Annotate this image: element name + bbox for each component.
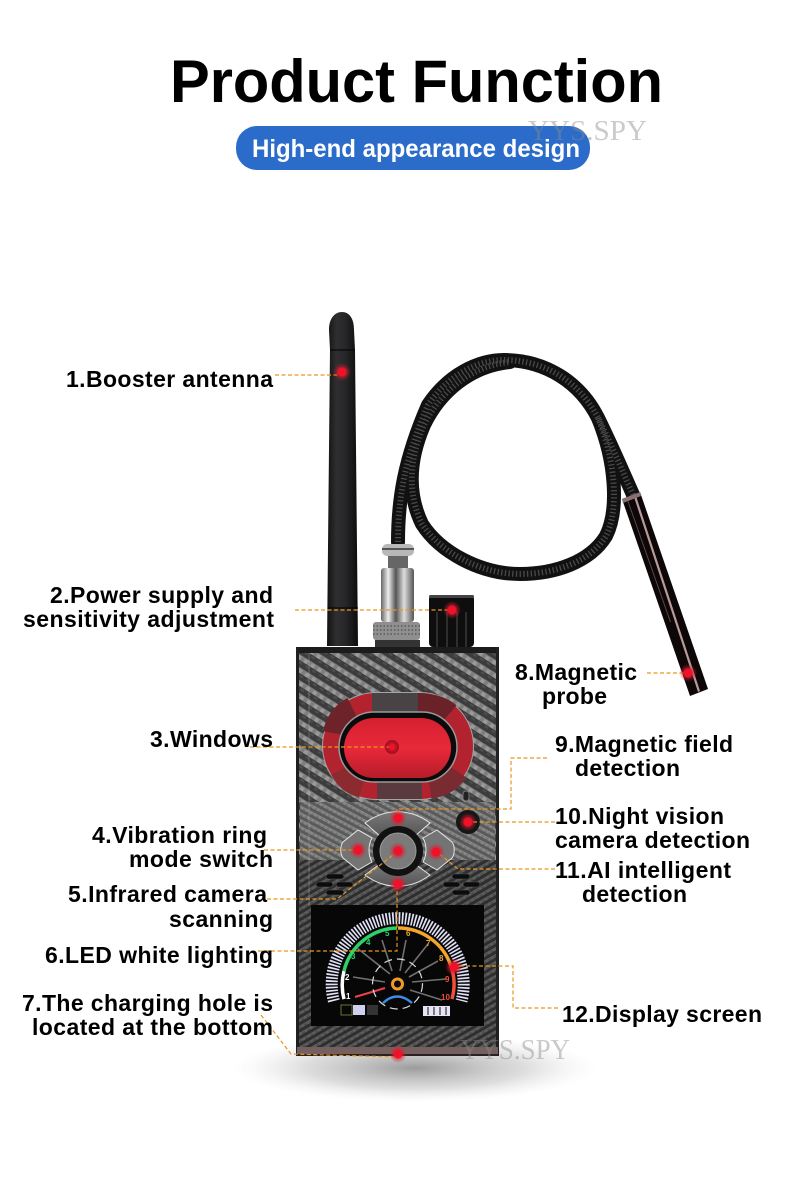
label 9: magnetic field: 9.Magnetic field (555, 731, 733, 757)
gauge numbers: 9 (445, 975, 450, 984)
gauge numbers: 3 (351, 952, 356, 961)
gauge numbers: 10 (441, 993, 450, 1002)
label 7: charging hole: 7.The charging hole is (22, 990, 273, 1016)
label 1: booster antenna: 1.Booster antenna (66, 366, 273, 392)
label 2: power supply: 2.Power supply and (50, 582, 273, 608)
gauge ticks (332, 918, 464, 1001)
label 10: night vision: 10.Night vision (555, 803, 724, 829)
label 4: vibration ring: 4.Vibration ring (92, 822, 267, 848)
label 11: AI detection: 11.AI intelligent (555, 857, 731, 883)
watermark: bottom: YYS.SPY (460, 1035, 570, 1066)
gauge numbers: 4 (366, 938, 371, 947)
label 9: magnetic field: detection (575, 755, 680, 781)
window ring (333, 703, 463, 789)
label 8: magnetic probe (515, 659, 637, 709)
label 11: AI detection (555, 857, 731, 907)
gauge numbers: 5 (385, 929, 390, 938)
night vision lens (456, 810, 480, 834)
label 8: magnetic probe: 8.Magnetic (515, 659, 637, 685)
label 5: infrared camera (68, 881, 273, 932)
magnetic probe head (622, 492, 708, 696)
gauge numbers: 8 (439, 954, 444, 963)
label 10: night vision: camera detection (555, 827, 750, 853)
gauge numbers: 7 (426, 939, 431, 948)
gauge numbers: 2 (345, 973, 350, 982)
gauge numbers: 1 (346, 992, 351, 1001)
gauge numbers: 6 (406, 929, 411, 938)
device body (296, 647, 499, 1056)
label 4: vibration ring (92, 822, 273, 872)
label 5: infrared camera: 5.Infrared camera (68, 881, 267, 907)
antenna (327, 312, 358, 646)
gauge numbers (345, 929, 450, 1002)
label 7: charging hole (22, 990, 273, 1040)
label 10: night vision (555, 803, 750, 853)
label 7: charging hole: located at the bottom (32, 1014, 273, 1040)
gauge needles (353, 940, 446, 1000)
control buttons (341, 812, 454, 886)
status icons (341, 1005, 450, 1016)
label 2: power supply: sensitivity adjustment (23, 606, 274, 632)
ground shadow (233, 1034, 597, 1102)
magnetic probe cable (398, 360, 634, 574)
badge: subtitle pill (236, 126, 590, 170)
label 4: vibration ring: mode switch (129, 846, 273, 872)
label 5: infrared camera: scanning (169, 906, 273, 932)
label 12: display screen: 12.Display screen (562, 1001, 762, 1027)
display screen (311, 905, 484, 1026)
label 8: magnetic probe: probe (542, 683, 607, 709)
title: Product Function (170, 48, 663, 115)
power knob (429, 595, 474, 647)
speaker vents (316, 874, 480, 895)
watermark: top: YYS.SPY (528, 115, 647, 147)
gauge colour arcs (342, 928, 454, 999)
label 6: LED lighting: 6.LED white lighting (45, 942, 273, 968)
label 2: power supply (23, 582, 274, 632)
badge: subtitle pill: High-end appearance design (252, 135, 580, 163)
sensor dot on window (385, 740, 399, 754)
red window (344, 718, 451, 778)
label 11: AI detection: detection (582, 881, 687, 907)
marker dots (333, 363, 697, 1063)
label 3: windows: 3.Windows (150, 726, 273, 752)
gauge inner dial (372, 959, 422, 1009)
small sensor (463, 791, 469, 801)
leader lines (250, 375, 688, 1057)
label 9: magnetic field (555, 731, 733, 781)
connector (373, 544, 420, 647)
